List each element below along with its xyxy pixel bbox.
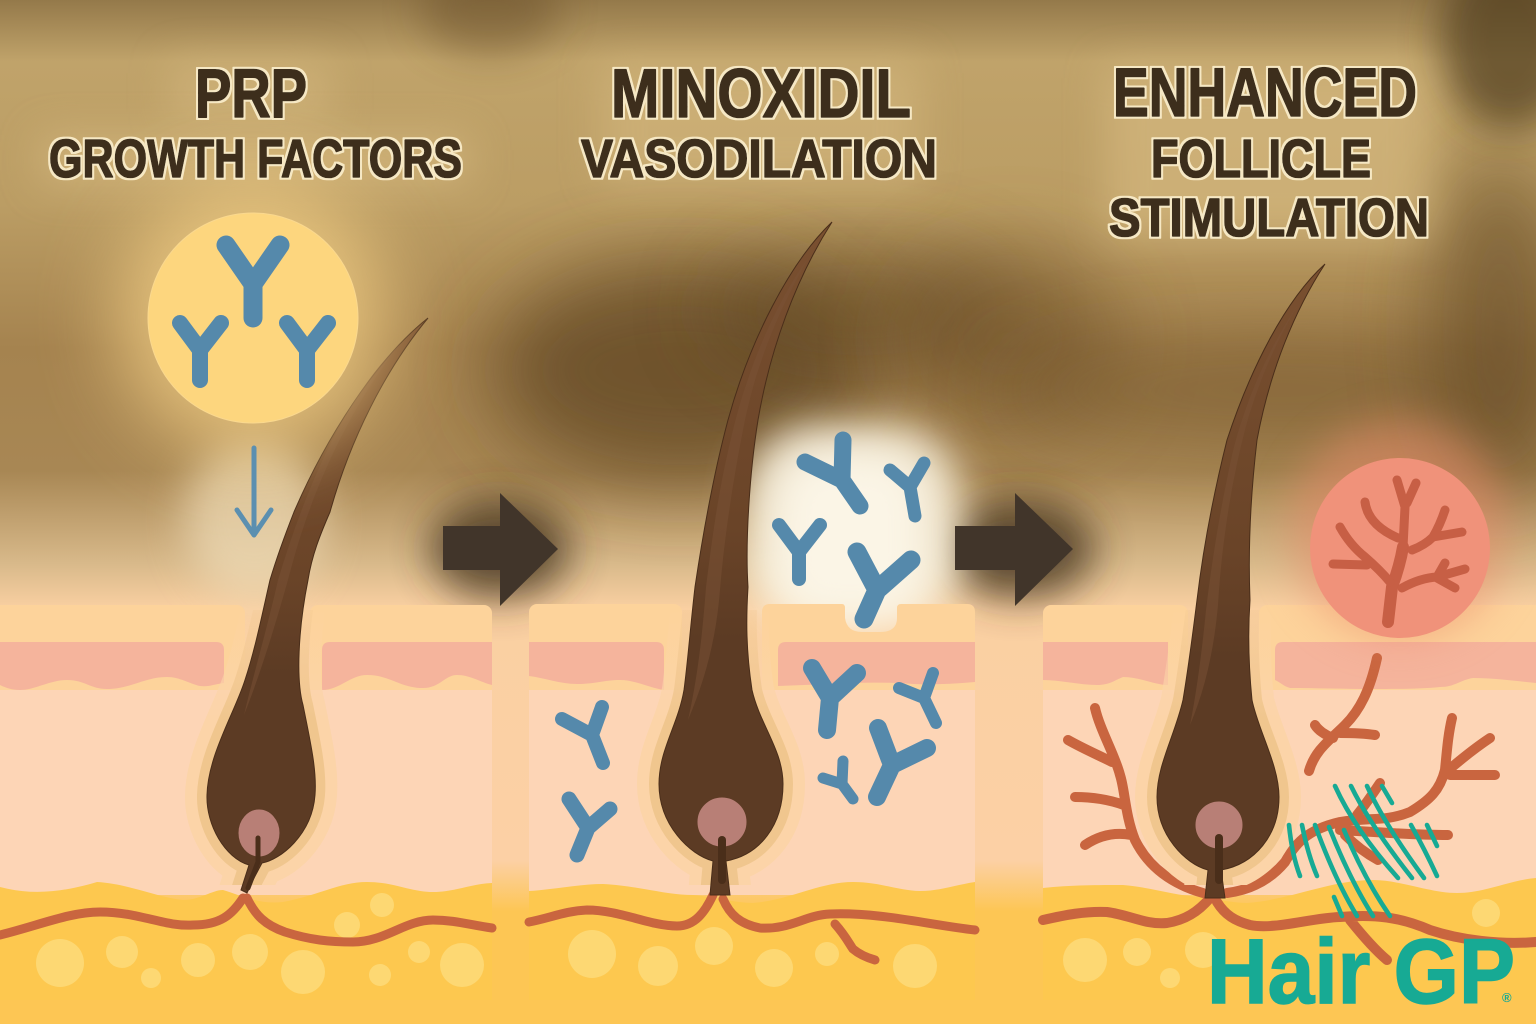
panel: enhanced follicle stimulation bbox=[1043, 264, 1536, 1000]
hair bbox=[1157, 264, 1325, 898]
fat cells bbox=[1063, 899, 1500, 988]
branching vessel icon bbox=[1333, 480, 1465, 622]
heading: PRP growth factors: GROWTH FACTORS bbox=[49, 129, 462, 189]
hair bbox=[207, 318, 428, 893]
heading: PRP growth factors bbox=[49, 55, 462, 189]
follicle sheath bbox=[185, 637, 338, 885]
blood vessels bbox=[1043, 658, 1536, 960]
heading: minoxidil vasodilation bbox=[581, 55, 937, 189]
panel: minoxidil vasodilation bbox=[529, 222, 975, 1000]
blood vessel bbox=[0, 898, 492, 942]
arrow: PRP to minoxidil bbox=[443, 493, 558, 606]
heading: enhanced follicle stimulation: ENHANCED bbox=[1113, 54, 1417, 131]
logo: Hair GP: ® bbox=[1502, 990, 1512, 1005]
hair bbox=[659, 222, 832, 895]
skin layers bbox=[0, 605, 492, 1000]
arrow: down to follicle bbox=[237, 448, 271, 535]
logo hair strands bbox=[1289, 786, 1437, 916]
heading: minoxidil vasodilation: MINOXIDIL bbox=[611, 55, 911, 132]
growth factor circle bbox=[118, 183, 388, 453]
heading: enhanced follicle stimulation: STIMULATION bbox=[1109, 188, 1429, 248]
follicle sheath bbox=[637, 610, 805, 885]
skin layers bbox=[529, 604, 975, 1000]
growth factor molecules in dermis bbox=[562, 668, 936, 855]
heading: minoxidil vasodilation: VASODILATION bbox=[581, 129, 937, 189]
logo: Hair GP bbox=[1207, 786, 1515, 1023]
bright glow bbox=[745, 425, 960, 625]
vasodilation circle bbox=[1290, 420, 1510, 640]
growth factor molecules above skin bbox=[779, 440, 924, 619]
fat cells bbox=[36, 893, 484, 994]
follicle sheath bbox=[1135, 637, 1301, 885]
heading: enhanced follicle stimulation bbox=[1109, 54, 1429, 248]
skin layers bbox=[1043, 605, 1536, 1000]
arrow: minoxidil to enhanced bbox=[955, 493, 1073, 606]
heading: PRP growth factors: PRP bbox=[195, 55, 307, 132]
growth factor molecules bbox=[180, 245, 328, 380]
logo: Hair GP: Hair GP bbox=[1207, 921, 1515, 1023]
fat cells bbox=[568, 927, 937, 988]
panel: PRP growth factors bbox=[0, 183, 492, 1000]
blood vessel bbox=[529, 895, 975, 960]
heading: enhanced follicle stimulation: FOLLICLE bbox=[1151, 129, 1371, 189]
